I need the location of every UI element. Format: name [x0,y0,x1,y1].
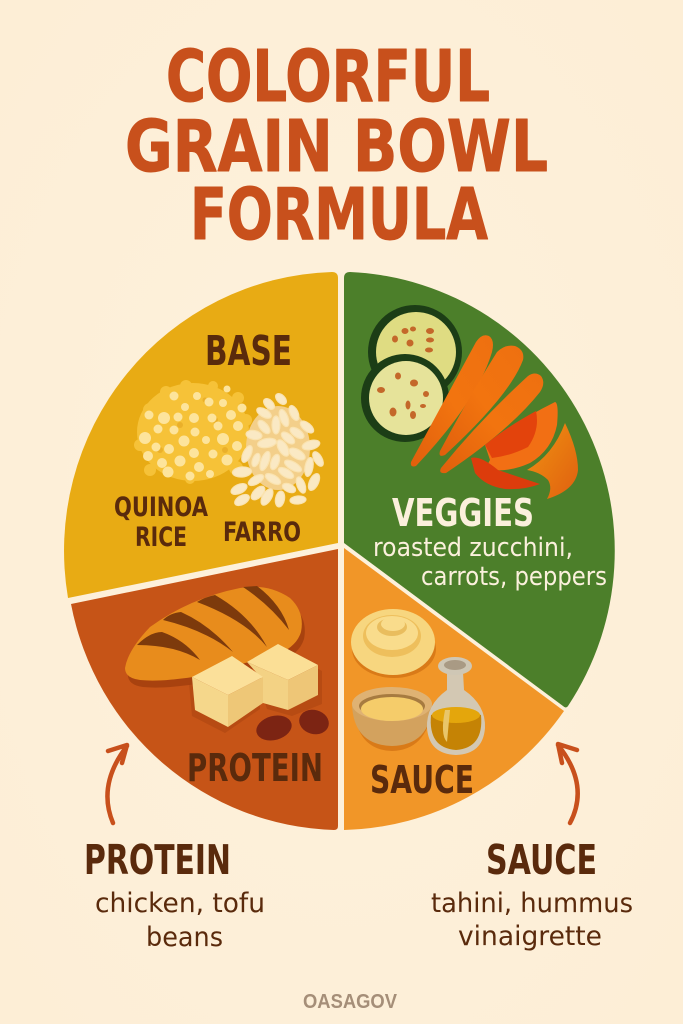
panel: base [64,272,338,598]
icon: bread loaf [125,586,305,688]
title: COLORFUL [166,35,490,118]
protein callout: PROTEIN [84,836,231,884]
base heading: BASE [205,327,292,375]
arrow: protein [107,745,127,823]
panel: sauce [344,548,564,830]
base wedge [64,272,338,598]
icon: roasted peppers [471,402,578,499]
protein wedge [71,549,338,830]
icon: carrots [411,335,543,473]
protein label in wedge: PROTEIN [187,746,323,790]
sauce callout: tahini, hummus [431,888,633,919]
icon: zucchini slices [361,305,462,442]
sauce callout [431,836,633,952]
icon: tofu cubes [189,644,322,733]
sauce callout: SAUCE [486,836,597,884]
icon: rice pile [229,392,325,508]
sauce label in wedge: SAUCE [370,758,474,802]
sauce wedge [344,548,564,830]
icon: beans [254,707,332,744]
panel: protein [71,549,338,830]
veggies description: roasted zucchini, [373,533,573,563]
title: FORMULA [190,173,488,256]
protein callout [84,836,265,953]
title: GRAIN BOWL [125,105,548,188]
protein callout: beans [146,922,223,953]
veggies heading: VEGGIES [392,491,534,535]
base ingredient labels [114,492,301,553]
icon: hummus mound [351,609,436,678]
sauce callout: vinaigrette [458,921,602,952]
base ingredient labels: QUINOA [114,492,208,523]
watermark: OASAGOV [303,991,398,1013]
base ingredient labels: RICE [135,522,187,553]
title [125,35,548,256]
icon: bowl of sauce [352,687,432,751]
icon: quinoa pile [134,380,252,484]
protein callout: chicken, tofu [95,888,265,919]
veggies description: carrots, peppers [421,562,607,592]
veggies wedge [344,272,615,708]
arrow: sauce [558,744,578,823]
base ingredient labels: FARRO [223,517,301,548]
icon: oil bottle [427,657,485,755]
veggies description [373,533,607,592]
panel: veggies [344,272,615,708]
